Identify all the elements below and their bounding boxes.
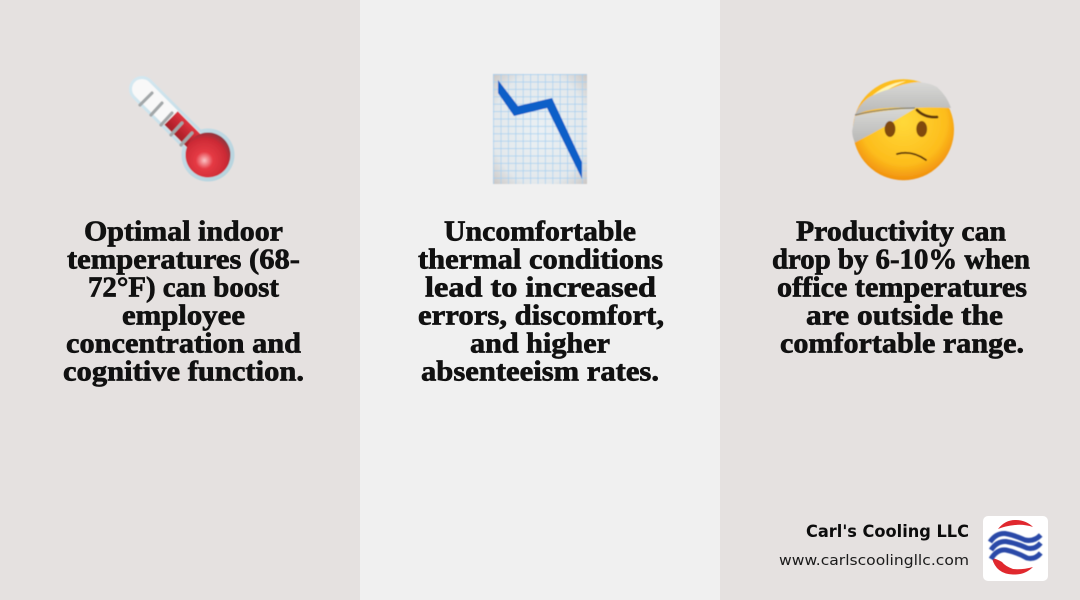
text block: middle panel [418, 216, 664, 388]
text block: middle panel: lead to increased [425, 272, 656, 304]
icon: thermometer [140, 89, 234, 182]
icon: face with head bandage [852, 79, 954, 180]
text block: left panel: 72°F) can boost [88, 272, 279, 304]
text block: right panel [772, 216, 1030, 360]
text block: right panel: comfortable range. [780, 328, 1024, 360]
text block: middle panel: thermal conditions [418, 244, 663, 276]
company name: Carl's Cooling LLC [806, 522, 969, 541]
panel: right background [720, 0, 1080, 600]
text block: right panel: Productivity can [796, 216, 1006, 248]
text block: right panel: are outside the [806, 300, 1003, 332]
company website: www.carlscoolingllc.com [779, 553, 969, 569]
text block: left panel: Optimal indoor [84, 216, 283, 248]
panel: middle background [360, 0, 720, 600]
text block: right panel: drop by 6-10% when [772, 244, 1030, 276]
text block: left panel: cognitive function. [63, 356, 304, 388]
icon: chart decreasing [493, 74, 587, 184]
panel: left background [0, 0, 360, 600]
text block: middle panel: Uncomfortable [444, 216, 636, 248]
text block: left panel: temperatures (68- [67, 244, 300, 276]
text block: right panel: office temperatures [777, 272, 1027, 304]
text block: middle panel: errors, discomfort, [418, 300, 664, 332]
text block: left panel: employee [122, 300, 245, 332]
logo [983, 516, 1048, 581]
text block: left panel: concentration and [66, 328, 301, 360]
text block: left panel [63, 216, 304, 388]
text block: middle panel: absenteeism rates. [421, 356, 659, 388]
text block: middle panel: and higher [470, 328, 610, 360]
